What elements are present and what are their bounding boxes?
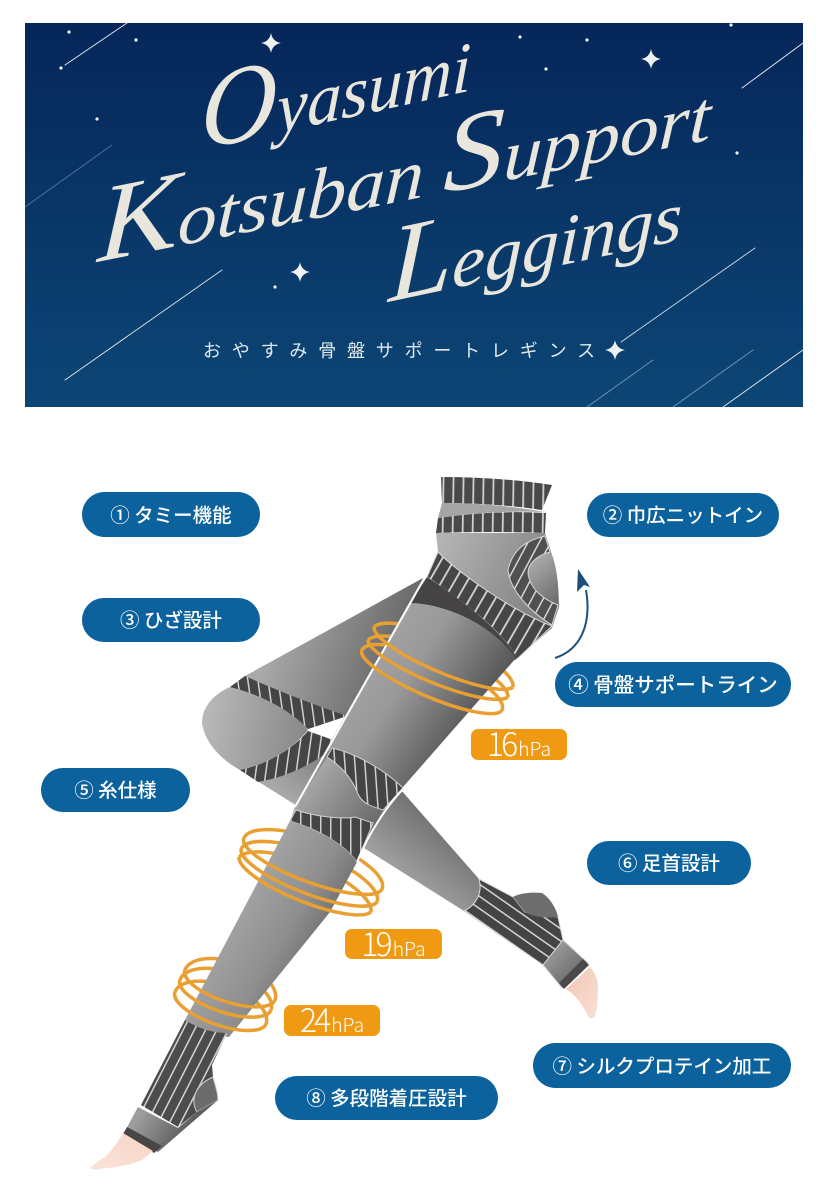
back sock rib [464, 879, 563, 965]
front sock rib [141, 1020, 227, 1127]
thigh diagonal rib [427, 552, 552, 659]
front leg [90, 477, 559, 1170]
right knee edge line [357, 789, 403, 862]
back foot band [543, 940, 588, 988]
front foot band [124, 1100, 218, 1152]
label 4: ④ 骨盤サポートライン [568, 668, 778, 698]
label 4 [555, 662, 791, 707]
waist gap [438, 503, 545, 518]
pressure badge 24hPa [284, 1005, 380, 1036]
label 8 [275, 1076, 498, 1120]
front knee rib lower [290, 810, 373, 862]
stars [59, 23, 739, 360]
back thigh [230, 578, 423, 729]
pressure badge 24hPa: hPa [331, 1009, 364, 1038]
pressure badge 19hPa: hPa [393, 933, 426, 962]
title: Kotsuban Support: Kotsuban Support [94, 40, 717, 287]
arrow [555, 569, 590, 658]
compression rings front [175, 627, 513, 1031]
back leg [202, 578, 598, 1018]
front toes [90, 1133, 153, 1170]
label 1: ① タミー機能 [110, 499, 232, 528]
back shin [240, 745, 480, 911]
label 1 [82, 492, 260, 537]
label 3 [82, 598, 260, 642]
label 6: ⑥ 足首設計 [618, 847, 720, 876]
pressure badge 19hPa [345, 929, 442, 959]
title: Leggings: Leggings [385, 140, 685, 327]
pressure badge 16hPa: hPa [518, 733, 551, 762]
label 5 [41, 768, 190, 812]
label 2 [587, 493, 779, 537]
hip [427, 533, 559, 660]
banner [25, 0, 803, 407]
second waist band [436, 512, 546, 533]
front heel [194, 1077, 218, 1112]
back knee panel [202, 687, 308, 770]
front thigh [323, 578, 516, 787]
back knee rib upper [230, 676, 347, 729]
front knee panel [290, 748, 403, 862]
hip crescent rib [508, 536, 558, 625]
pressure badge 16hPa: 16 [487, 720, 515, 766]
pressure badge 19hPa: 19 [361, 920, 390, 966]
label 7: ⑦ シルクプロテイン加工 [553, 1050, 771, 1079]
pressure badge 16hPa [471, 729, 567, 760]
title: Oyasumi: Oyasumi [199, 0, 473, 174]
leg divider line [295, 577, 425, 807]
label 6 [587, 841, 751, 885]
label 8: ⑧ 多段階着圧設計 [306, 1082, 467, 1111]
calf [185, 821, 357, 1037]
subtitle: おやすみ骨盤サポートレギンス [203, 337, 595, 363]
label 7 [533, 1043, 791, 1088]
back heel [513, 893, 558, 917]
label 5: ⑤ 糸仕様 [74, 774, 157, 803]
waistband [441, 477, 552, 510]
back toes [566, 967, 598, 1018]
front knee rib upper [327, 748, 403, 810]
pressure badge 24hPa: 24 [300, 996, 328, 1042]
compression rings behind [175, 623, 513, 1024]
label 3: ③ ひざ設計 [120, 604, 222, 633]
label 2: ② 巾広ニットイン [603, 499, 763, 528]
back knee rib lower [240, 731, 333, 782]
thigh dark wedge [410, 577, 517, 660]
hip inner panel [528, 552, 558, 605]
